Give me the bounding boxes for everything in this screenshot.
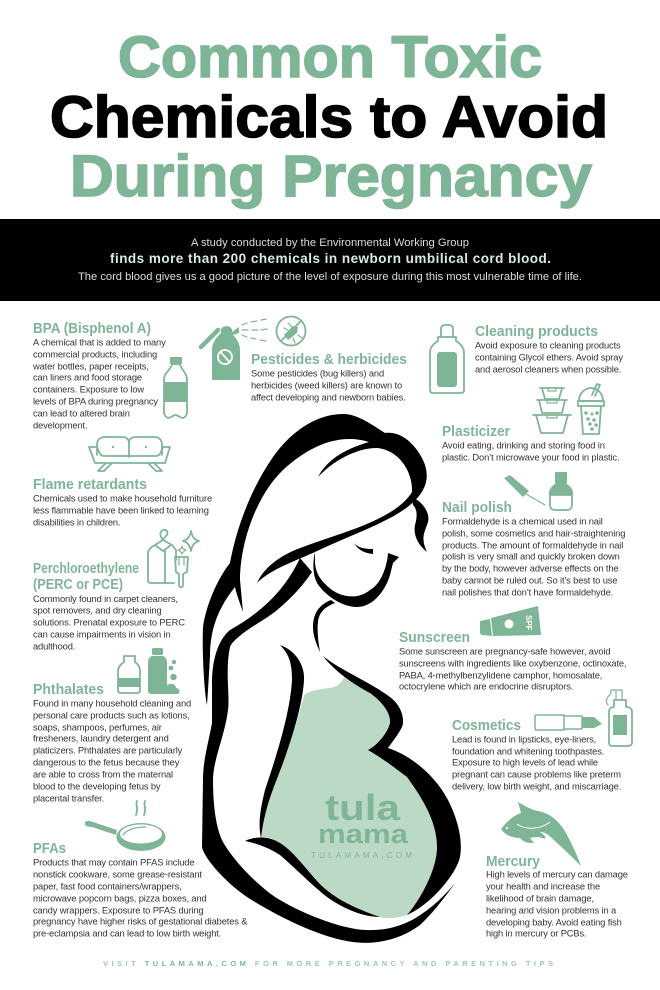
icon: crossed-out bug <box>276 316 306 346</box>
logo: tula mama: tula <box>325 787 401 828</box>
body text: paper, fast food containers/wrappers, <box>33 882 182 892</box>
body text <box>33 494 212 528</box>
body text: personal care products such as lotions, <box>33 711 190 721</box>
body text: PABA, 4-methylbenzylidene camphor, homosalate, <box>399 671 602 681</box>
title: Common Toxic <box>118 25 542 90</box>
heading: Mercury <box>486 854 540 870</box>
body text: sunscreens with ingredients like oxybenzone, octinoxate, <box>399 659 626 669</box>
inner arm <box>260 645 304 838</box>
body text: nonstick cookware, some grease-resistant <box>33 870 202 880</box>
body text: candy wrappers. Exposure to PFAS during <box>33 906 204 916</box>
heading: Flame retardants <box>33 477 147 493</box>
chest and belly outline <box>323 656 461 915</box>
body text: commercial products, including <box>33 350 157 360</box>
body text: High levels of mercury can damage <box>486 870 628 880</box>
icon: nail polish brush <box>504 475 545 505</box>
icon: bubble tea cup <box>578 384 604 434</box>
body text: solutions. Prenatal exposure to PERC <box>33 618 185 628</box>
intro banner <box>0 219 660 301</box>
body text: and aerosol cleaners when possible. <box>475 365 621 375</box>
panel: nail polish <box>442 472 625 598</box>
icon: pump bottle <box>606 690 632 746</box>
body text <box>442 441 619 463</box>
body text: blood to the developing fetus by <box>33 782 161 792</box>
body text: containing Glycol ethers. Avoid spray <box>475 353 623 363</box>
belly fill <box>261 676 437 918</box>
panel: BPA <box>32 321 187 431</box>
heading: Pesticides & herbicides <box>251 352 407 368</box>
heading: BPA (Bisphenol A) <box>33 321 151 337</box>
body text: can lead to altered brain <box>33 409 130 419</box>
body text: fresheners, laundry detergent and <box>33 734 169 744</box>
face outline <box>313 552 399 607</box>
body text: Commonly found in carpet cleaners, <box>33 594 178 604</box>
heading: Phthalates <box>33 682 104 698</box>
body text: less flammable have been linked to learning <box>33 506 209 516</box>
body text <box>399 647 626 692</box>
heading <box>33 561 139 593</box>
body text: water bottles, paper receipts, <box>32 362 149 372</box>
body text: spot removers, and dry cleaning <box>33 606 162 616</box>
body text: affect developing and newborn babies. <box>251 393 406 403</box>
heading: Nail polish <box>442 500 512 516</box>
heading: PFAs <box>33 841 66 857</box>
icon: fish <box>501 802 581 866</box>
back and arm outline <box>202 558 455 943</box>
body text: Some sunscreen are pregnancy-safe however, avoid <box>399 647 610 657</box>
body text <box>475 341 623 375</box>
body text: Chemicals used to make household furniture <box>33 494 212 504</box>
body text <box>452 735 621 792</box>
icon: sunscreen tube: SPF <box>524 615 533 631</box>
intro banner: A study conducted by the Environmental Working Group <box>191 237 469 249</box>
heading: Cosmetics <box>452 718 521 734</box>
panel: flame retardants <box>33 437 212 528</box>
body text: nail polishes that don’t have formaldehyde. <box>442 588 613 598</box>
body text: polish is very small and quickly broken down <box>442 552 620 562</box>
logo: tula mama: TULAMAMA.COM <box>311 851 412 860</box>
body text: polish, some cosmetics and hair-straightening <box>442 529 625 539</box>
panel: cleaning products <box>430 324 623 393</box>
body text: octocrylene which are endocrine disruptors. <box>399 682 573 692</box>
body text: A chemical that is added to many <box>33 338 166 348</box>
body text: herbicides (weed killers) are known to <box>251 381 402 391</box>
illustration: pregnant woman silhouette <box>202 414 461 943</box>
body text: products. The amount of formaldehyde in nail <box>442 541 623 551</box>
body text: can cause impairments in vision in <box>33 630 171 640</box>
body text <box>486 870 628 939</box>
body text <box>32 338 166 431</box>
body text: are able to cross from the maternal <box>33 770 173 780</box>
logo: tula mama <box>311 787 412 860</box>
body text: Found in many household cleaning and <box>33 699 191 709</box>
body text: levels of BPA during pregnancy <box>33 397 158 407</box>
icon: bottle and foam <box>148 648 180 694</box>
heading: Sunscreen <box>399 630 470 646</box>
body text: Lead is found in lipsticks, eye-liners, <box>452 735 596 745</box>
icon: dry cleaned shirt and brush <box>148 530 199 587</box>
body text: plastic. Don’t microwave your food in plastic. <box>442 453 619 463</box>
heading: Cleaning products <box>475 324 598 340</box>
body text: likelihood of brain damage, <box>486 894 594 904</box>
footer: VISIT TULAMAMA.COM FOR MORE PREGNANCY AND PARENTING TIPS <box>103 959 553 968</box>
body text: microwave popcorn bags, pizza boxes, and <box>33 894 207 904</box>
icon: sunscreen tube <box>480 606 541 636</box>
body text <box>33 594 185 652</box>
icon: nail polish bottle <box>549 472 573 510</box>
icon: couch <box>89 437 170 471</box>
body text: Products that may contain PFAS include <box>33 858 194 868</box>
icon: detergent jug <box>118 656 140 693</box>
intro banner: finds more than 200 chemicals in newborn umbilical cord blood. <box>110 251 551 266</box>
body text: can liners and food storage <box>33 373 142 383</box>
body text: pre-eclampsia and can lead to low birth weight. <box>33 929 221 939</box>
body text: soaps, shampoos, perfumes, air <box>33 723 162 733</box>
title <box>50 25 608 209</box>
body text: containers. Exposure to low <box>33 385 144 395</box>
logo: tula mama: mama <box>318 819 409 849</box>
body text <box>33 699 191 804</box>
body text: Avoid eating, drinking and storing food in <box>442 441 605 451</box>
icon: cleaner bottle <box>430 325 464 393</box>
intro banner: The cord blood gives us a good picture of the level of exposure during this most vulnerable time of life. <box>78 271 582 283</box>
body text: Exposure to high levels of lead while <box>452 758 598 768</box>
body text: Formaldehyde is a chemical used in nail <box>442 517 603 527</box>
neck <box>313 600 335 652</box>
body text: your health and increase the <box>486 882 600 892</box>
body text: pregnancy have higher risks of gestational diabetes & <box>33 917 248 927</box>
panel: perchloroethylene <box>33 530 199 652</box>
closed eye <box>354 543 373 554</box>
title: Chemicals to Avoid <box>50 85 608 150</box>
panel: mercury <box>486 802 628 939</box>
heading: Perchloroethylene <box>33 561 139 577</box>
icon: lipstick <box>535 715 602 730</box>
icon: frying pan <box>85 801 166 851</box>
body text: Some pesticides (bug killers) and <box>251 369 384 379</box>
panel: plasticizer <box>442 384 619 463</box>
panel: pesticides and herbicides <box>201 316 407 403</box>
body text: disabilities in children. <box>33 518 120 528</box>
body text: dangerous to the fetus because they <box>33 758 180 768</box>
body text: adulthood. <box>33 642 75 652</box>
body text <box>33 858 248 939</box>
body text <box>442 517 625 598</box>
panel: phthalates <box>33 648 191 804</box>
panel: cosmetics <box>452 690 632 792</box>
body text: delivery, low birth weight, and miscarriage. <box>452 782 621 792</box>
hair <box>203 414 427 705</box>
body text: placental transfer. <box>33 794 104 804</box>
panel: sunscreen <box>399 606 626 692</box>
body text: foundation and whitening toothpastes. <box>452 747 604 757</box>
icon: stacked food containers <box>533 388 571 433</box>
body text: platicizers. Phthalates are particularly <box>33 746 183 756</box>
icon: spray bottle <box>201 319 267 380</box>
hair wisp <box>412 497 428 552</box>
body text: development. <box>33 421 87 431</box>
body text: pregnant can cause problems like preterm <box>452 770 621 780</box>
body text: baby cannot be ruled out. So it’s best to use <box>442 576 617 586</box>
icon: plastic bottle <box>164 357 187 418</box>
body text: hearing and vision problems in a <box>486 906 617 916</box>
title: During Pregnancy <box>70 144 592 209</box>
heading: (PERC or PCE) <box>33 577 123 593</box>
lower belly line <box>245 837 380 917</box>
body text <box>251 369 406 403</box>
body text: Avoid exposure to cleaning products <box>475 341 621 351</box>
body text: high in mercury or PCBs. <box>486 929 586 939</box>
panel: PFAs <box>33 801 248 939</box>
body text: by the body, however adverse effects on the <box>442 564 618 574</box>
heading: Plasticizer <box>442 424 510 440</box>
body text: developing baby. Avoid eating fish <box>486 918 622 928</box>
